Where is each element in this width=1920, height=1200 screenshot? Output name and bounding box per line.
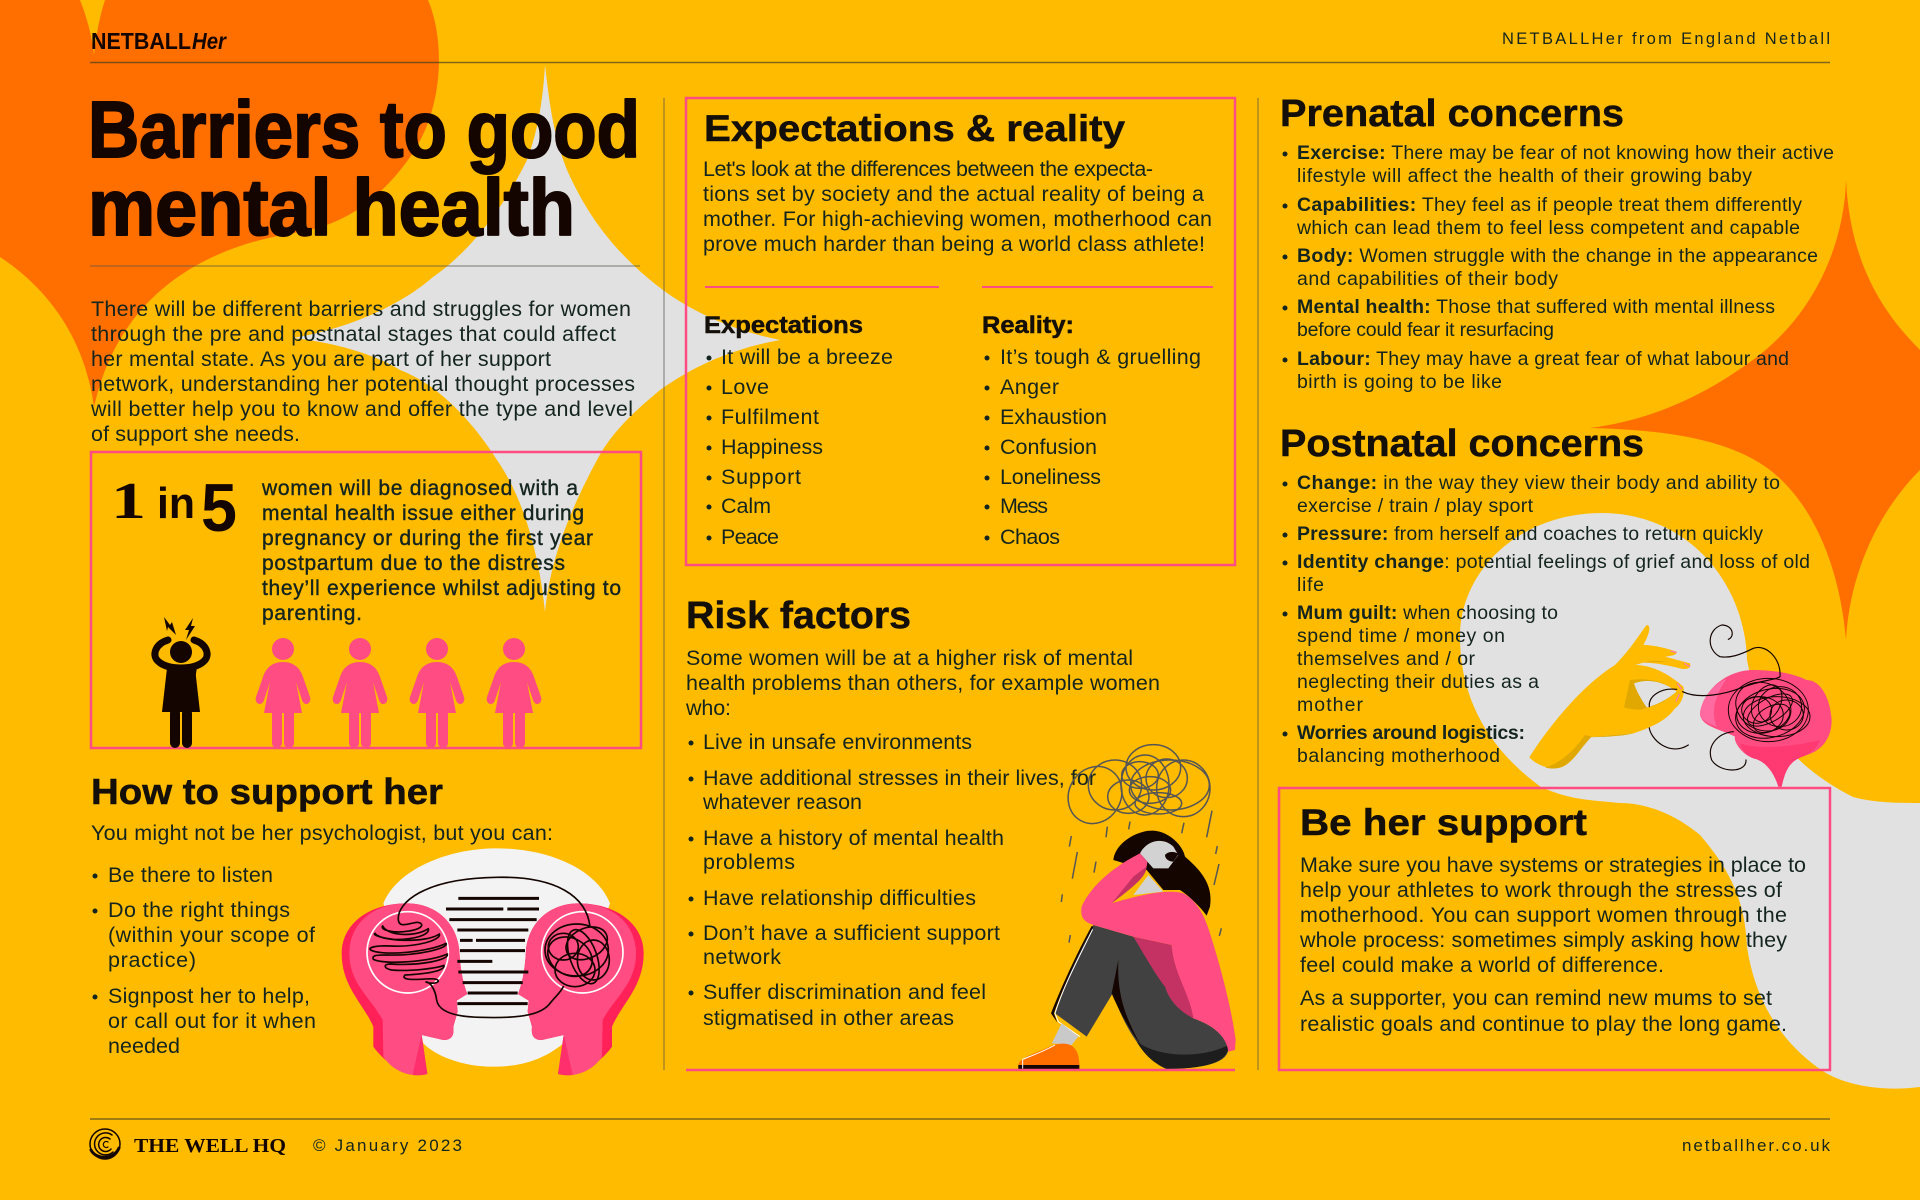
column: reality: Loneliness <box>1000 465 1101 489</box>
column: reality: Mess <box>1000 494 1048 518</box>
footer logo: The Well HQ <box>90 1129 286 1159</box>
prenatal list <box>1282 142 1834 393</box>
risk list: stigmatised in other areas <box>703 1006 954 1030</box>
header credit: NETBALLHer from England Netball <box>1502 30 1830 48</box>
intro text <box>90 297 635 446</box>
column: expectations: It will be a breeze <box>721 345 893 369</box>
prenatal list: Labour: They may have a great fear of what labour and <box>1297 348 1789 370</box>
stat description: postpartum due to the distress <box>262 552 565 575</box>
expectations intro text: tions set by society and the actual reality of being a <box>703 182 1204 206</box>
column: reality: Reality: <box>982 312 1074 339</box>
postnatal list: mother <box>1297 694 1364 716</box>
prenatal list: Capabilities: They feel as if people treat them differently <box>1297 194 1802 216</box>
postnatal list <box>1282 472 1810 767</box>
risk list: Live in unsafe environments <box>703 730 972 754</box>
support list: needed <box>108 1034 180 1058</box>
footer date: © January 2023 <box>313 1136 462 1155</box>
support paragraph two: As a supporter, you can remind new mums to set <box>1300 986 1772 1010</box>
risk intro <box>685 646 1160 720</box>
risk list: Have relationship difficulties <box>703 886 976 910</box>
expectations intro text: prove much harder than being a world class athlete! <box>703 232 1205 256</box>
panel: Be her support <box>1279 788 1830 1070</box>
header logo: NETBALLHer: NETBALL <box>91 28 191 54</box>
postnatal list: life <box>1297 574 1324 596</box>
intro text: of support she needs. <box>91 422 300 446</box>
support list: Be there to listen <box>108 863 273 887</box>
column: expectations: Peace <box>721 525 779 549</box>
column: reality: Confusion <box>1000 435 1097 459</box>
illustration: sad woman under scribble cloud <box>1018 745 1236 1069</box>
column: expectations <box>704 312 893 549</box>
column: reality: It’s tough & gruelling <box>1000 345 1201 369</box>
support paragraph two: realistic goals and continue to play the long game. <box>1300 1012 1787 1036</box>
header logo: NETBALLHer: Her <box>192 28 227 54</box>
icon: spiral <box>90 1129 120 1159</box>
stat number: 1 in 5: 5 <box>201 470 237 546</box>
prenatal list: Exercise: There may be fear of not knowing how their active <box>1297 142 1834 164</box>
prenatal list: Body: Women struggle with the change in the appearance <box>1297 245 1818 267</box>
intro text: through the pre and postnatal stages that could affect <box>91 322 616 346</box>
support paragraph one: feel could make a world of difference. <box>1300 953 1664 977</box>
footer logo: The Well HQ: THE WELL HQ <box>134 1135 286 1157</box>
risk intro: Some women will be at a higher risk of mental <box>686 646 1133 670</box>
risk list: Have a history of mental health <box>703 826 1004 850</box>
support list: (within your scope of <box>108 923 315 947</box>
postnatal list: neglecting their duties as a <box>1297 671 1539 693</box>
support paragraph two <box>1300 986 1787 1036</box>
support paragraph one: motherhood. You can support women through the <box>1300 903 1787 927</box>
icons: four pink women figures <box>256 638 541 748</box>
expectations intro text: mother. For high-achieving women, motherhood can <box>703 207 1212 231</box>
postnatal list: Change: in the way they view their body and ability to <box>1297 472 1780 494</box>
postnatal list: exercise / train / play sport <box>1297 495 1534 517</box>
support list <box>92 863 316 1058</box>
postnatal list: Mum guilt: when choosing to <box>1297 602 1558 624</box>
postnatal list: themselves and / or <box>1297 648 1476 670</box>
intro text: There will be different barriers and struggles for women <box>91 297 631 321</box>
column: reality: Anger <box>1000 375 1059 399</box>
column: expectations: Happiness <box>721 435 823 459</box>
risk list: network <box>703 945 781 969</box>
risk list: whatever reason <box>702 790 862 814</box>
footer url: netballher.co.uk <box>1682 1136 1830 1155</box>
prenatal list: birth is going to be like <box>1297 371 1502 393</box>
stat description: they’ll experience whilst adjusting to <box>262 577 621 600</box>
risk intro: health problems than others, for example women <box>686 671 1160 695</box>
heading: Risk factors: Risk factors <box>686 595 911 637</box>
stat description <box>261 477 621 625</box>
column: expectations: Love <box>721 375 769 399</box>
illustration: two heads talking with tangled thoughts <box>342 848 644 1075</box>
support list: Do the right things <box>108 898 290 922</box>
prenatal list: lifestyle will affect the health of their growing baby <box>1297 165 1752 187</box>
support list: practice) <box>108 948 196 972</box>
column: expectations: Calm <box>721 494 771 518</box>
panel: Expectations and reality <box>686 98 1235 565</box>
heading: How to support her: How to support her <box>91 771 443 812</box>
support paragraph one: help your athletes to work through the stresses of <box>1300 878 1782 902</box>
risk list: Have additional stresses in their lives, for <box>703 766 1096 790</box>
stat number: 1 in 5: in <box>157 479 195 528</box>
postnatal list: Pressure: from herself and coaches to return quickly <box>1297 523 1763 545</box>
prenatal list: and capabilities of their body <box>1297 268 1558 290</box>
icon: distressed woman figure <box>155 617 207 748</box>
support paragraph one: whole process: sometimes simply asking how they <box>1299 928 1787 952</box>
heading: Be her support: Be her support <box>1300 802 1587 843</box>
expectations intro text: Let's look at the differences between the expecta- <box>703 157 1153 181</box>
stat description: women will be diagnosed with a <box>261 477 578 500</box>
postnatal list: Identity change: potential feelings of grief and loss of old <box>1297 551 1810 573</box>
icon: brain <box>1700 670 1832 787</box>
icon: hand <box>1529 625 1690 769</box>
stat description: parenting. <box>262 602 362 625</box>
risk intro: who: <box>685 696 731 720</box>
postnatal list: balancing motherhood <box>1297 745 1500 767</box>
column: expectations: Fulfilment <box>721 405 819 429</box>
panel: 1 in 5 statistic <box>91 452 641 748</box>
expectations intro text <box>703 157 1212 256</box>
prenatal list: before could fear it resurfacing <box>1297 319 1554 341</box>
prenatal list: which can lead them to feel less competent and capable <box>1296 217 1800 239</box>
illustration: hand pulling thread from tangled brain <box>1529 625 1832 787</box>
column: expectations: Expectations <box>704 312 863 339</box>
support intro: You might not be her psychologist, but you can: <box>91 821 553 845</box>
risk list: problems <box>703 850 795 874</box>
heading: Expectations and reality: Expectations & reality <box>704 108 1125 149</box>
support paragraph one <box>1299 853 1806 977</box>
tangled thread <box>1649 625 1810 770</box>
stat number: 1 in 5: 1 <box>111 473 146 530</box>
heading: Postnatal concerns: Postnatal concerns <box>1280 423 1644 465</box>
prenatal list: Mental health: Those that suffered with mental illness <box>1297 296 1775 318</box>
risk list <box>688 730 1096 1030</box>
column: reality: Exhaustion <box>1000 405 1107 429</box>
heading: Prenatal concerns: Prenatal concerns <box>1280 93 1624 135</box>
title: mental health <box>88 163 575 252</box>
risk list: Don’t have a sufficient support <box>703 921 1000 945</box>
stat number: 1 in 5 <box>111 470 237 546</box>
support list: Signpost her to help, <box>108 984 310 1008</box>
risk list: Suffer discrimination and feel <box>703 980 986 1004</box>
postnatal list: Worries around logistics: <box>1297 722 1525 744</box>
stat description: mental health issue either during <box>262 502 584 525</box>
scribble rain cloud <box>1058 745 1221 943</box>
intro text: network, understanding her potential thought processes <box>91 372 635 396</box>
column: expectations: Support <box>721 465 801 489</box>
support list: or call out for it when <box>108 1009 316 1033</box>
woman figure <box>1018 831 1236 1069</box>
postnatal list: spend time / money on <box>1297 625 1505 647</box>
support paragraph one: Make sure you have systems or strategies in place to <box>1300 853 1806 877</box>
title <box>88 85 640 252</box>
intro text: will better help you to know and offer the type and level <box>90 397 633 421</box>
stat description: pregnancy or during the first year <box>262 527 593 550</box>
column: reality <box>982 312 1201 549</box>
intro text: her mental state. As you are part of her support <box>91 347 551 371</box>
title: Barriers to good <box>88 85 640 174</box>
column: reality: Chaos <box>1000 525 1060 549</box>
